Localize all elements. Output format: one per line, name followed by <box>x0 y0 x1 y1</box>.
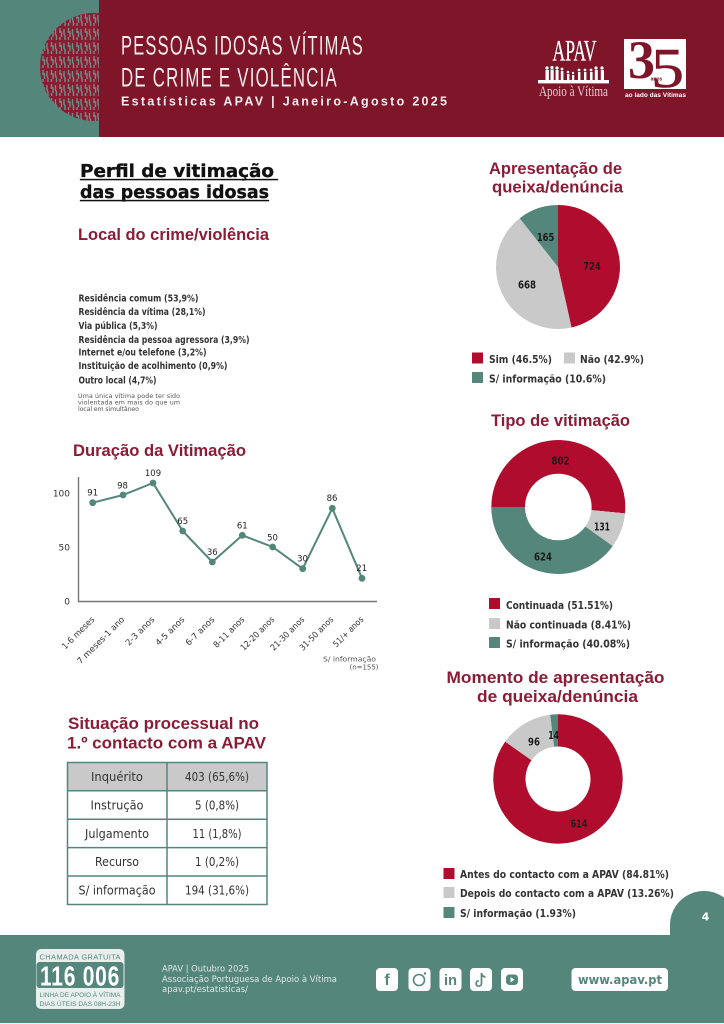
list: local do crime: Internet e/ou telefone (3,2%) <box>78 348 206 358</box>
table: situação processual: 194 (31,6%) <box>185 882 249 898</box>
heading: situação processual: 1.º contacto com a APAV <box>67 734 267 752</box>
donut chart: momento de apresentação: 14 <box>548 730 559 742</box>
icon: facebook: f <box>384 972 390 989</box>
heading: momento de apresentação <box>446 668 664 706</box>
legend: momento de apresentação: Depois do contacto com a APAV (13.26%) <box>460 887 674 900</box>
line chart: duração da vitimação: 30 <box>297 554 308 564</box>
logo: 35 anos <box>624 30 687 100</box>
line chart: duração da vitimação: 0 <box>64 598 70 608</box>
line chart: duração da vitimação: 6-7 anos <box>184 615 218 648</box>
badge: 116 006 <box>36 949 124 1009</box>
badge: 116 006: CHAMADA GRATUITA <box>40 952 120 962</box>
title: DE CRIME E VIOLÊNCIA <box>121 62 338 92</box>
legend: tipo de vitimação <box>489 598 631 650</box>
line chart: duração da vitimação: 1-6 meses <box>60 615 98 652</box>
pie chart: apresentação de queixa <box>496 205 620 329</box>
legend: apresentação de queixa: Sim (46.5%) <box>489 353 552 366</box>
heading: apresentação de queixa: queixa/denúncia <box>492 178 624 196</box>
line chart: duração da vitimação: 109 <box>145 469 161 479</box>
line chart: duração da vitimação: 91 <box>87 488 98 498</box>
donut chart: tipo de vitimação <box>491 440 625 574</box>
legend: momento de apresentação: Antes do contacto com a APAV (84.81%) <box>460 868 669 881</box>
logo: APAV: APAV <box>552 35 597 68</box>
donut chart: momento de apresentação <box>493 714 623 844</box>
line chart: duração da vitimação: 65 <box>177 517 188 527</box>
donut chart: tipo de vitimação: 131 <box>594 522 610 534</box>
title <box>121 30 364 92</box>
table: situação processual: 5 (0,8%) <box>195 798 239 812</box>
icon: instagram <box>408 968 430 991</box>
pie chart: apresentação de queixa: 165 <box>537 232 554 244</box>
heading: momento de apresentação: de queixa/denúncia <box>477 687 639 706</box>
table: situação processual: Recurso <box>95 854 139 869</box>
badge: 116 006: DIAS ÚTEIS DAS 08H-23H <box>40 999 121 1008</box>
heading: local do crime: Local do crime/violência <box>78 225 270 244</box>
icon: linkedin <box>440 968 462 991</box>
icon: youtube <box>501 968 523 991</box>
title: PESSOAS IDOSAS VÍTIMAS <box>121 30 364 60</box>
heading: tipo de vitimação: Tipo de vitimação <box>491 411 630 430</box>
logo: 35 anos: ao lado das Vítimas <box>625 93 687 99</box>
heading: perfil de vitimação <box>80 161 278 203</box>
header band <box>0 0 724 137</box>
note: local: Uma única vítima pode ter sido <box>78 392 180 400</box>
line chart: duração da vitimação: 12-20 anos <box>239 615 277 653</box>
heading: perfil de vitimação: Perfil de vitimação <box>80 161 274 182</box>
list: local do crime: Residência da pessoa agressora (3,9%) <box>78 334 250 346</box>
table: situação processual: Instrução <box>90 798 144 812</box>
heading: duração: Duração da Vitimação <box>73 441 246 460</box>
note: sem informação: (n=155) <box>350 664 379 672</box>
donut chart: tipo de vitimação: 624 <box>534 552 552 564</box>
pie chart: apresentação de queixa: 668 <box>518 280 536 292</box>
legend: apresentação de queixa: Não (42.9%) <box>580 353 644 366</box>
logo: 35 anos: anos <box>651 76 663 82</box>
heading: apresentação de queixa: Apresentação de <box>489 159 622 178</box>
line chart: duração da vitimação: 50 <box>59 544 70 554</box>
icon: facebook <box>376 968 398 991</box>
legend: tipo de vitimação: Continuada (51.51%) <box>506 599 613 612</box>
footer text: APAV | Outubro 2025 <box>162 964 249 974</box>
table: situação processual: 1 (0,2%) <box>195 854 239 869</box>
logo: 35 anos: 3 <box>628 30 655 90</box>
note: sem informação: S/ informação <box>323 656 376 664</box>
heading: momento de apresentação: Momento de apresentação <box>446 668 664 687</box>
footer band <box>0 935 724 1023</box>
list: local do crime: Via pública (5,3%) <box>78 320 158 332</box>
heading: perfil de vitimação: das pessoas idosas <box>80 182 269 203</box>
legend: apresentação de queixa <box>472 352 644 386</box>
line chart: duração da vitimação: 21 <box>356 564 367 574</box>
logo: APAV <box>538 35 609 100</box>
logo: APAV: Apoio à Vítima <box>539 84 608 100</box>
line chart: duração da vitimação: 61 <box>237 522 248 532</box>
website button: www.apav.pt <box>578 972 662 987</box>
line chart: duração da vitimação: 98 <box>117 482 128 492</box>
footer text <box>162 964 337 995</box>
icon: tiktok <box>470 968 492 991</box>
line chart: duração da vitimação: 2-3 anos <box>124 615 158 648</box>
line chart: duração da vitimação: 86 <box>327 494 337 504</box>
legend: tipo de vitimação: S/ informação (40.08%) <box>506 638 630 650</box>
legend: tipo de vitimação: Não continuada (8.41%) <box>506 618 631 632</box>
logo: 35 anos: 5 <box>651 38 684 100</box>
line chart: duração da vitimação <box>53 469 377 667</box>
line chart: duração da vitimação: 7 meses-1 ano <box>76 615 127 667</box>
table: situação processual <box>68 762 267 904</box>
note: sem informação <box>323 656 379 672</box>
website button <box>572 968 668 991</box>
icon: patterned circle <box>40 13 99 121</box>
subtitle: Estatísticas APAV | Janeiro-Agosto 2025 <box>121 94 447 108</box>
line chart: duração da vitimação: 36 <box>207 548 218 558</box>
line chart: duração da vitimação: 21-30 anos <box>269 615 307 653</box>
note: local: local em simultâneo <box>78 405 139 413</box>
line chart: duração da vitimação: 50 <box>267 534 278 544</box>
heading: situação processual: Situação processual no <box>68 714 259 733</box>
legend: momento de apresentação <box>444 868 674 920</box>
table: situação processual: 403 (65,6%) <box>185 769 249 784</box>
line chart: duração da vitimação: 8-11 anos <box>212 615 248 650</box>
badge: 116 006: LINHA DE APOIO À VÍTIMA <box>40 990 121 999</box>
donut chart: momento de apresentação: 96 <box>528 736 540 748</box>
donut chart: momento de apresentação: 614 <box>570 818 588 830</box>
legend: apresentação de queixa: S/ informação (10.6%) <box>489 372 606 386</box>
list: local do crime <box>78 292 250 386</box>
note: local <box>78 392 180 413</box>
line chart: duração da vitimação: 4-5 anos <box>154 615 188 648</box>
icon: linkedin: in <box>444 973 457 989</box>
line chart: duração da vitimação: 100 <box>53 490 70 500</box>
line chart: duração da vitimação: 51/+ anos <box>331 615 366 650</box>
heading: apresentação de queixa <box>489 159 624 196</box>
list: local do crime: Instituição de acolhimento (0,9%) <box>78 361 228 372</box>
table: situação processual: 11 (1,8%) <box>192 826 242 841</box>
pie chart: apresentação de queixa: 724 <box>583 261 601 273</box>
page number: 4 <box>702 910 710 924</box>
legend: momento de apresentação: S/ informação (1.93%) <box>460 907 576 920</box>
page number <box>670 891 724 959</box>
list: local do crime: Residência comum (53,9%) <box>78 292 198 304</box>
footer text: Associação Portuguesa de Apoio à Vítima <box>162 975 337 985</box>
heading: situação processual <box>67 714 267 752</box>
note: local: violentada em mais do que um <box>78 400 180 406</box>
table: situação processual: S/ informação <box>78 882 156 898</box>
badge: 116 006: 116 006 <box>40 960 120 992</box>
table: situação processual: Inquérito <box>91 769 143 784</box>
line chart: duração da vitimação: 31-50 anos <box>298 615 336 653</box>
donut chart: tipo de vitimação: 802 <box>552 456 570 468</box>
footer text: apav.pt/estatisticas/ <box>162 985 248 995</box>
table: situação processual: Julgamento <box>84 826 149 841</box>
list: local do crime: Residência da vítima (28,1%) <box>78 306 206 318</box>
list: local do crime: Outro local (4,7%) <box>78 376 156 386</box>
